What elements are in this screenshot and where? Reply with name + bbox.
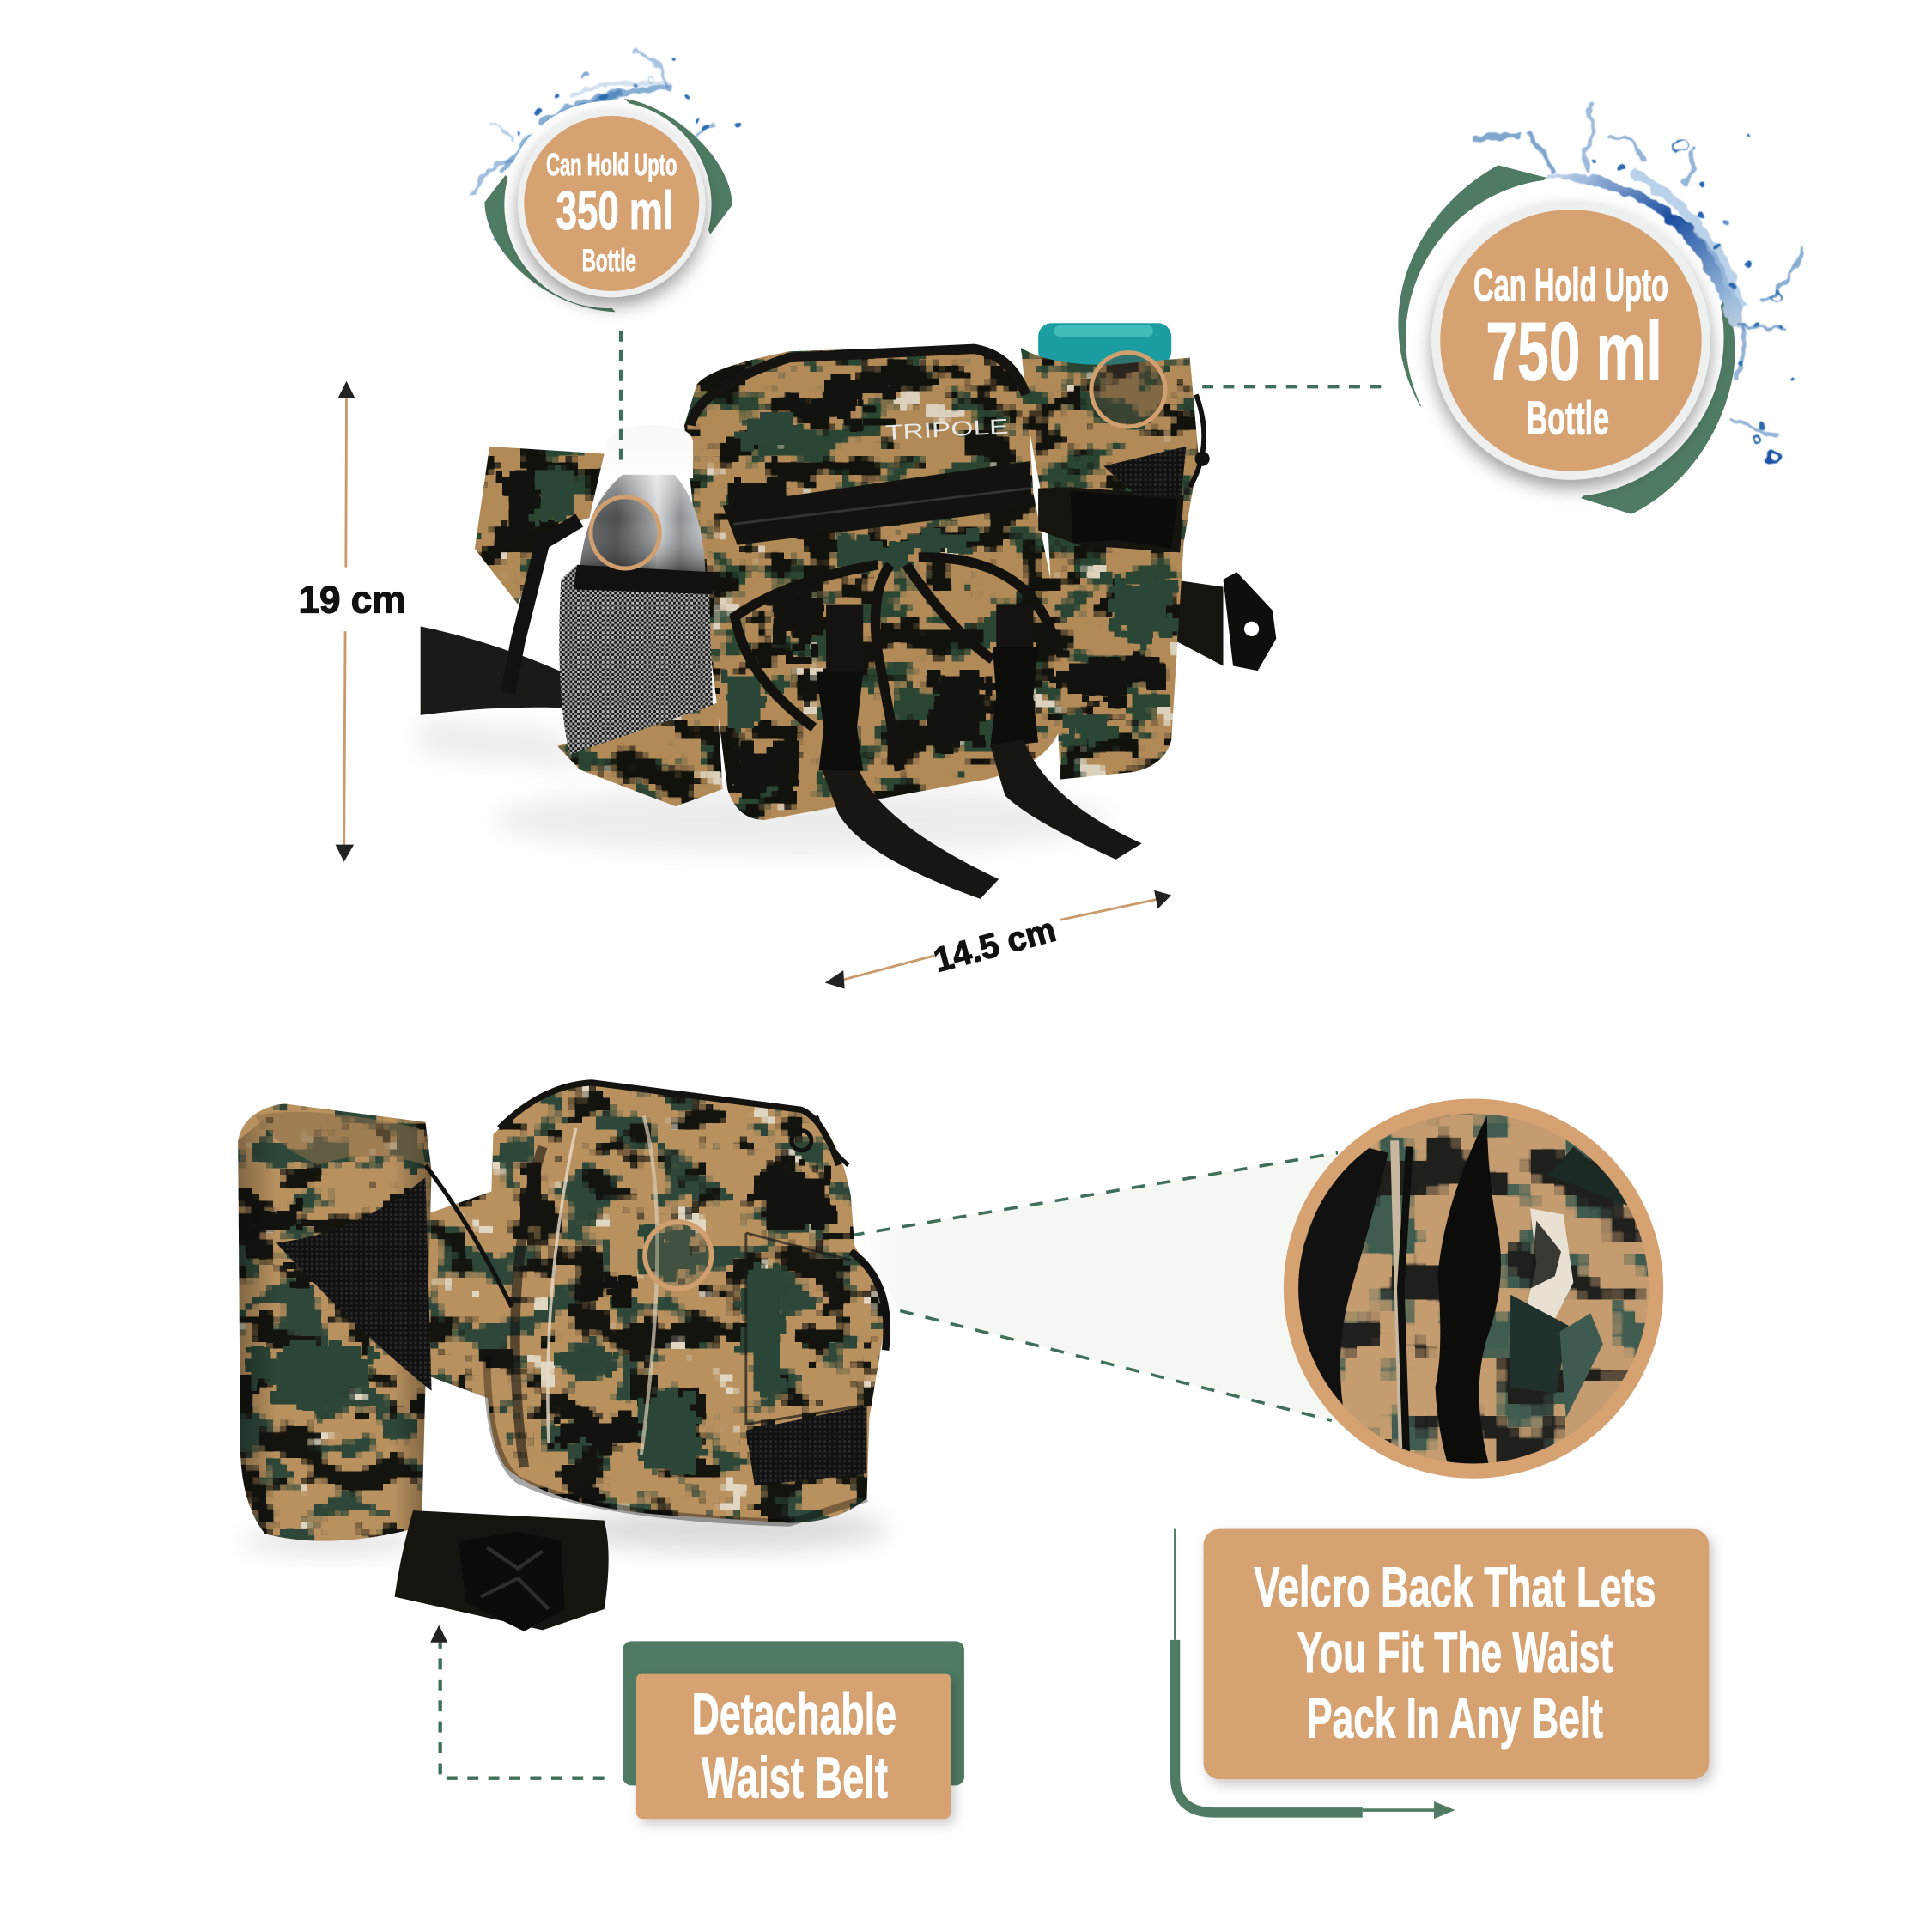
velcro feature text — [1254, 1555, 1656, 1749]
belt right with buckle — [1171, 572, 1276, 671]
green crescents — [484, 99, 732, 312]
green crescents — [1398, 165, 1735, 514]
clear bottle — [580, 425, 705, 574]
badge text: Can Hold Upto — [546, 148, 677, 182]
white backing — [1406, 179, 1724, 497]
magnified velcro detail circle — [1275, 1091, 1670, 1485]
holder mesh — [276, 1177, 432, 1391]
badge text: Can Hold Upto — [1473, 258, 1668, 311]
belt left — [421, 626, 565, 715]
pack seams — [487, 1116, 867, 1522]
water splash — [473, 52, 743, 240]
badge text: 750 ml — [1485, 306, 1662, 398]
lower product photo: back of waist pack — [232, 1065, 919, 1631]
velcro feature text: You Fit The Waist — [1297, 1620, 1613, 1684]
white backing — [504, 101, 712, 308]
350 ml badge — [473, 52, 743, 312]
callout connector to 750 ml — [1202, 386, 1388, 388]
holder buckle and mesh — [1038, 395, 1210, 552]
velcro feature text: Pack In Any Belt — [1307, 1686, 1603, 1749]
width dimension — [825, 890, 1171, 989]
holder shading — [238, 1103, 432, 1541]
badge text: Bottle — [582, 242, 636, 278]
velcro feature text: Velcro Back That Lets — [1254, 1555, 1656, 1619]
badge text — [546, 148, 677, 278]
hand-placed green camo patches — [252, 1233, 783, 1467]
pack top zipper — [500, 1083, 838, 1165]
badge ring — [518, 110, 705, 297]
camo fabric — [474, 348, 1199, 820]
badge ring — [1431, 201, 1710, 480]
mesh pocket — [559, 565, 713, 755]
white gap and seam — [1394, 1140, 1403, 1461]
front zipper band — [722, 461, 1032, 545]
hand-placed dark camo patches — [506, 380, 1159, 788]
width dimension: 14.5 cm — [930, 910, 1060, 980]
dashed arrow to belt — [430, 1625, 605, 1778]
detail ring on pack — [645, 1222, 712, 1289]
callout connector to 350 ml — [620, 331, 623, 462]
tan disc — [1440, 210, 1702, 471]
height dimension — [299, 381, 405, 862]
magnifier cone — [851, 1153, 1338, 1420]
badge text — [1473, 258, 1668, 444]
centre black spindle — [1436, 1116, 1501, 1479]
detachable belt box — [623, 1641, 964, 1819]
badge text: 350 ml — [556, 181, 673, 241]
side pocket mesh — [746, 1406, 867, 1485]
strap and buckle right — [990, 605, 1142, 860]
750 ml badge — [1398, 105, 1802, 514]
pack drawcord — [425, 1116, 887, 1350]
detachable belt text — [692, 1682, 896, 1811]
logo: TRIPOLE — [884, 416, 1009, 445]
top product photo: camo waist pack with bottles — [421, 323, 1276, 899]
pocket straps arch — [735, 557, 1058, 771]
detachable belt text: Waist Belt — [702, 1747, 888, 1811]
teal bottle cap — [1038, 323, 1171, 365]
hand-placed dark camo patches — [252, 1171, 832, 1502]
water splash — [1473, 105, 1802, 461]
cream camo patch — [1527, 1208, 1573, 1320]
strap and buckle left — [817, 605, 999, 899]
detail ring on holder — [1091, 353, 1165, 427]
tan disc — [524, 116, 699, 291]
detail ring on bottle — [591, 497, 659, 568]
holder opening — [255, 1112, 425, 1165]
green elbow arrow — [1176, 1529, 1455, 1819]
camo fabric — [238, 1085, 883, 1541]
detached belt and buckle — [395, 1510, 609, 1631]
velcro black band left — [1296, 1146, 1388, 1422]
top zipper — [690, 349, 1026, 425]
velcro feature box — [1204, 1529, 1709, 1779]
height dimension: 19 cm — [299, 580, 405, 622]
detachable belt text: Detachable — [692, 1682, 896, 1747]
left flap strap and clip — [508, 520, 580, 693]
badge text: Bottle — [1527, 392, 1609, 444]
hand-placed green camo patches — [543, 419, 1171, 740]
